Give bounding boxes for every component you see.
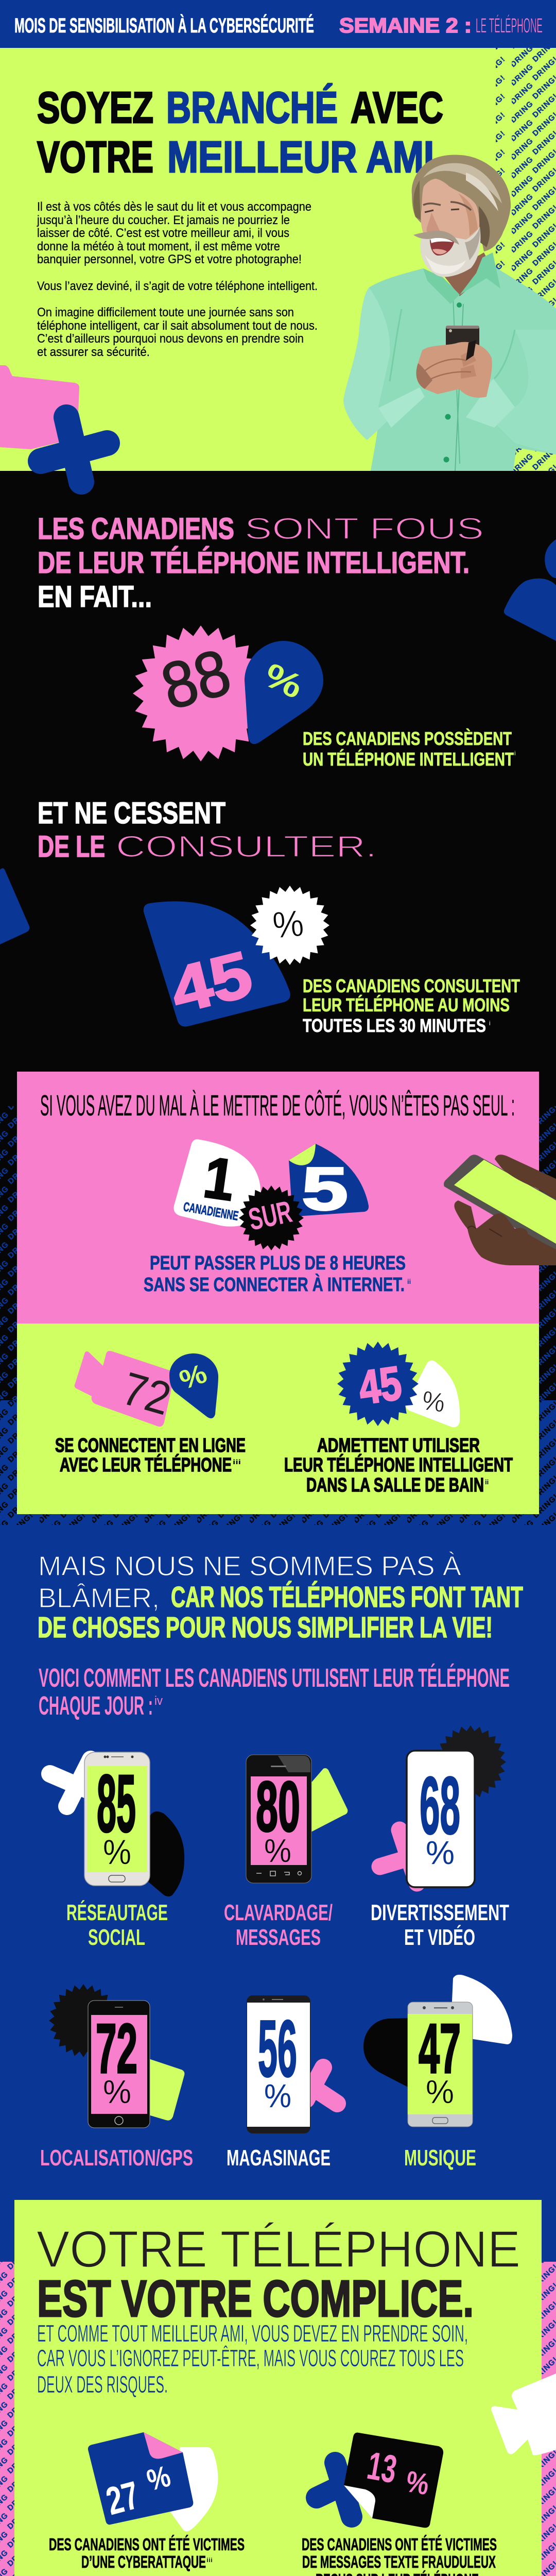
- icon: blue cross: [41, 417, 107, 482]
- stat phone: music 47: 47: [419, 2009, 461, 2088]
- label: social: [66, 1900, 168, 1950]
- stat: 88 percent badge: %: [258, 655, 309, 706]
- caption: 45 percent: TOUTES LES 30 MINUTES: [303, 1015, 486, 1036]
- stat: 27 percent: 27: [101, 2473, 144, 2523]
- stat phone: shopping 56: 56: [258, 2004, 297, 2094]
- heading: canadians: DE LEUR TÉLÉPHONE INTELLIGENT.: [38, 546, 470, 580]
- stat phone: social 85: 85: [97, 1758, 136, 1849]
- heading: consult: [38, 796, 377, 863]
- stat: 72 percent camera badge: %: [176, 1359, 211, 1396]
- label: social: RÉSEAUTAGE: [66, 1900, 168, 1925]
- text block: intro: laisser de côté. C’est est votre meilleur ami, il vous: [37, 226, 289, 240]
- icon: pink folder shape: [0, 365, 79, 449]
- stat phone: shopping 56: [247, 1995, 337, 2133]
- panel: connected stats: [17, 1324, 539, 1514]
- caption: 1 in 5: PEUT PASSER PLUS DE 8 HEURES: [150, 1252, 406, 1274]
- text block: risks: DEUX DES RISQUES.: [37, 2371, 168, 2398]
- face: [421, 179, 480, 240]
- text block: intro: donne la météo à tout moment, il est même votre: [37, 240, 280, 253]
- text block: risks: [37, 2320, 468, 2398]
- title: MEILLEUR AMI: [167, 133, 434, 182]
- caption: 88 percent: [303, 728, 516, 770]
- text block: intro: Il est à vos côtés dès le saut du lit et vous accompagne: [37, 200, 311, 214]
- stat: 13 percent: %: [404, 2465, 431, 2501]
- stat: 13 percent: [317, 2433, 443, 2528]
- stat: 45 percent bathroom badge: 45: [356, 1357, 405, 1415]
- stat phone: messaging 80: 80: [256, 1767, 300, 1846]
- stat: 45 percent badge: [144, 886, 329, 1027]
- stat: 27 percent: [88, 2432, 218, 2531]
- heading: not to blame: BLÂMER,: [38, 1583, 160, 1614]
- stat phone: video 68: %: [426, 1834, 455, 1871]
- panel: canadians love their phones: [0, 512, 556, 1036]
- caption: 45 percent: [303, 975, 520, 1036]
- caption: 1 in 5: [144, 1252, 411, 1296]
- stat: 45 percent bathroom badge: %: [420, 1385, 447, 1418]
- stat phone: gps 72: %: [103, 2073, 131, 2110]
- stat: 1 canadian in 5: [174, 1139, 369, 1250]
- stat phone: gps 72: 72: [96, 2009, 137, 2088]
- heading: canadians: EN FAIT...: [38, 580, 152, 614]
- stat: 1 canadian in 5: 1: [200, 1145, 238, 1213]
- heading: canadians: LES CANADIENS: [38, 512, 234, 546]
- caption: 1 in 5: ii: [407, 1278, 411, 1285]
- caption: 45 percent bathroom: DANS LA SALLE DE BAIN: [306, 1475, 484, 1496]
- buttons: [444, 302, 462, 463]
- icon: blue shape right: [504, 539, 556, 641]
- heading: canadians: SONT FOUS: [245, 512, 484, 546]
- title: [37, 83, 443, 182]
- photo: smiling man holding a phone: [343, 155, 556, 471]
- caption: 88 percent: i: [514, 750, 516, 757]
- caption: 72 percent: iii: [233, 1458, 241, 1466]
- stat phone: messaging 80: %: [264, 1832, 291, 1869]
- caption: 45 percent: i: [489, 1020, 491, 1027]
- panel: your accomplice: [14, 2200, 556, 2576]
- subheading: daily use: iv: [154, 1694, 163, 1708]
- stat phone: music 47: %: [426, 2073, 454, 2110]
- subheading: daily use: [39, 1663, 510, 1720]
- title: BRANCHÉ: [166, 83, 338, 132]
- panel: hard to put down: [17, 1072, 539, 1324]
- hair: [412, 155, 511, 251]
- heading: canadians: [38, 512, 484, 614]
- heading: consult: DE LE: [38, 830, 105, 863]
- stat phone: video 68: [380, 1725, 506, 1887]
- header bar: SEMAINE 2 :: [339, 14, 472, 37]
- label: shopping: MAGASINAGE: [227, 2145, 331, 2171]
- stat: 45 percent bathroom badge: [337, 1342, 460, 1427]
- panel: hero: [0, 48, 556, 482]
- caption: cyberattack: iii: [206, 2556, 213, 2564]
- mouth: [430, 238, 454, 256]
- text block: intro: C’est d’ailleurs pourquoi nous devons en prendre soin: [37, 332, 304, 346]
- title: SOYEZ: [37, 83, 153, 132]
- caption: 72 percent: SE CONNECTENT EN LIGNE: [55, 1435, 246, 1456]
- heading: accomplice: VOTRE TÉLÉPHONE: [37, 2221, 520, 2278]
- stat: 27 percent: %: [144, 2459, 174, 2498]
- illustration: hand holding a phone: [444, 1155, 556, 1265]
- stat: 1 canadian in 5: SUR: [246, 1194, 295, 1237]
- title: AVEC: [351, 83, 443, 132]
- heading: consult: ET NE CESSENT: [38, 796, 225, 830]
- label: messaging: [224, 1900, 333, 1950]
- caption: 45 percent bathroom: [284, 1435, 513, 1496]
- stat: 72 percent camera badge: [75, 1351, 218, 1427]
- text block: intro: On imagine difficilement toute une journée sans son: [37, 306, 294, 319]
- caption: 45 percent bathroom: ADMETTENT UTILISER: [317, 1435, 480, 1456]
- label: messaging: MESSAGES: [236, 1925, 321, 1950]
- stat: 13 percent: 13: [364, 2444, 400, 2492]
- heading: not to blame: MAIS NOUS NE SOMMES PAS À: [38, 1551, 461, 1582]
- stat phone: music 47: [363, 1975, 512, 2127]
- caption: cyberattack: [49, 2535, 245, 2571]
- stat: 72 percent camera badge: 72: [116, 1363, 176, 1426]
- stat: 88 percent badge: 88: [154, 635, 238, 723]
- stat phone: video 68: 68: [420, 1760, 460, 1851]
- heading: consult: CONSULTER.: [116, 830, 377, 863]
- title: VOTRE: [37, 133, 153, 182]
- label: gps: LOCALISATION/GPS: [40, 2145, 193, 2171]
- label: video: ET VIDÉO: [404, 1924, 475, 1950]
- stat phone: gps 72: [49, 1984, 184, 2128]
- beard: [420, 227, 480, 277]
- hands: [416, 342, 492, 398]
- text block: intro: Vous l’avez deviné, il s’agit de votre téléphone intelligent.: [37, 279, 318, 293]
- neck: [445, 252, 486, 296]
- phone in hand: [446, 328, 479, 345]
- pattern strips: dring on pink: [0, 2262, 556, 2576]
- stat: 45 percent badge: 45: [164, 938, 259, 1027]
- text block: intro: banquier personnel, votre GPS et votre photographe!: [37, 252, 302, 266]
- heading: not to blame: [38, 1551, 523, 1644]
- label: messaging: CLAVARDAGE/: [224, 1900, 333, 1925]
- icon: white camera shape: [491, 2374, 556, 2455]
- caption: cyberattack: DES CANADIENS ONT ÉTÉ VICTIMES: [49, 2535, 245, 2554]
- collar: [423, 252, 500, 304]
- caption: fraud texts: [302, 2535, 497, 2576]
- shirt: [343, 265, 556, 471]
- label: music: MUSIQUE: [404, 2145, 476, 2171]
- panel: how canadians use phones: [38, 1551, 523, 2171]
- stat phone: shopping 56: %: [264, 2077, 291, 2114]
- text block: intro: jusqu’à l’heure du coucher. Et jamais ne pourriez le: [37, 213, 290, 227]
- caption: cyberattack: D’UNE CYBERATTAQUE: [81, 2552, 206, 2571]
- stat phone: social 85: [50, 1752, 184, 1896]
- header bar: MOIS DE SENSIBILISATION À LA CYBERSÉCURITÉ: [14, 14, 314, 37]
- text block: intro: et assurer sa sécurité.: [37, 345, 150, 359]
- caption: 1 in 5: SANS SE CONNECTER À INTERNET.: [144, 1273, 405, 1296]
- caption: 72 percent: [55, 1435, 246, 1476]
- caption: 45 percent bathroom: ii: [485, 1478, 489, 1486]
- stat: 88 percent badge: [133, 625, 323, 761]
- stat phone: social 85: %: [103, 1833, 131, 1872]
- heading: accomplice: [37, 2221, 520, 2328]
- label: social: SOCIAL: [88, 1925, 145, 1950]
- subheading: daily use: CHAQUE JOUR :: [39, 1691, 153, 1720]
- pattern strips: dring on black and blue: [0, 1106, 556, 1525]
- icon: blue shape left: [0, 868, 29, 944]
- caption: 72 percent: AVEC LEUR TÉLÉPHONE: [60, 1453, 232, 1476]
- stat: 1 canadian in 5: 5: [302, 1155, 348, 1223]
- stat: 45 percent badge: %: [271, 903, 305, 946]
- text block: intro: [37, 200, 318, 359]
- stat: 1 canadian in 5: CANADIENNE: [182, 1199, 239, 1224]
- text block: intro: téléphone intelligent, car il sait absolument tout de nous.: [37, 319, 318, 333]
- label: video: [371, 1900, 509, 1950]
- header bar: [0, 0, 556, 48]
- stat phone: messaging 80: [246, 1755, 348, 1883]
